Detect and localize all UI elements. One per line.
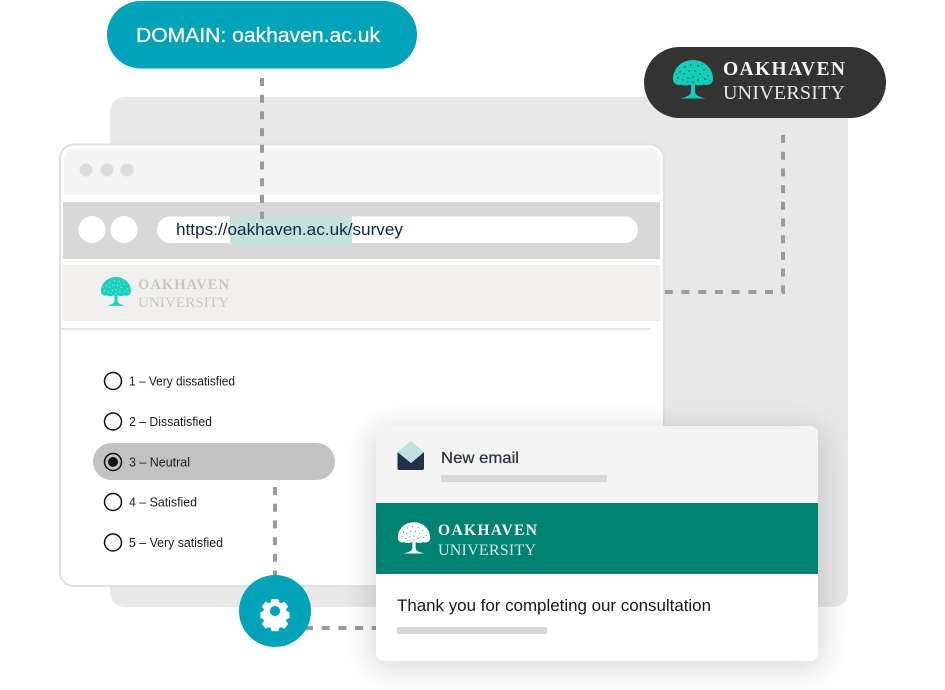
selected option highlight: [93, 443, 335, 480]
option 4: 4 – Satisfied: [129, 496, 197, 510]
connector: domain to address bar: [260, 78, 264, 219]
browser window: [60, 144, 664, 586]
address bar: [63, 202, 660, 259]
option 3 selected: 3 – Neutral: [129, 456, 190, 470]
option 5: [104, 534, 223, 551]
connector: survey to automation: [273, 487, 277, 576]
email brand band: OAKHAVEN: [438, 522, 537, 539]
window title bar: [64, 148, 660, 195]
connector: automation to email: [305, 626, 376, 630]
university logo pill: [644, 47, 886, 118]
icon: open envelope: [398, 441, 424, 470]
email header: [376, 426, 818, 503]
background panel: [110, 97, 848, 607]
icon: tree: [673, 60, 713, 98]
email brand band: UNIVERSITY: [438, 542, 536, 559]
address bar: https://oakhaven.ac.uk/survey: [176, 220, 403, 239]
icon: automation gear: [239, 575, 311, 647]
survey options: [93, 372, 335, 551]
email brand band: [376, 503, 818, 574]
domain pill: [107, 1, 417, 68]
university logo pill: OAKHAVEN: [723, 59, 845, 80]
option 4: [104, 494, 197, 510]
website logo band: UNIVERSITY: [138, 295, 229, 311]
option 1: [104, 372, 235, 390]
email header: New email: [441, 450, 519, 467]
website logo band: [63, 265, 660, 321]
option 3 selected: [104, 454, 190, 470]
option 2: 2 – Dissatisfied: [129, 415, 212, 429]
connector: logo to website band: [664, 135, 783, 292]
university logo pill: UNIVERSITY: [723, 82, 845, 104]
option 5: 5 – Very satisfied: [129, 536, 223, 550]
email card: [376, 426, 818, 661]
option 2: [104, 413, 212, 430]
option 1: 1 – Very dissatisfied: [129, 374, 235, 388]
email card shadow: [372, 430, 822, 668]
email message: Thank you for completing our consultation: [397, 596, 711, 615]
domain pill: DOMAIN: oakhaven.ac.uk: [136, 24, 381, 47]
website logo band: OAKHAVEN: [138, 277, 230, 293]
